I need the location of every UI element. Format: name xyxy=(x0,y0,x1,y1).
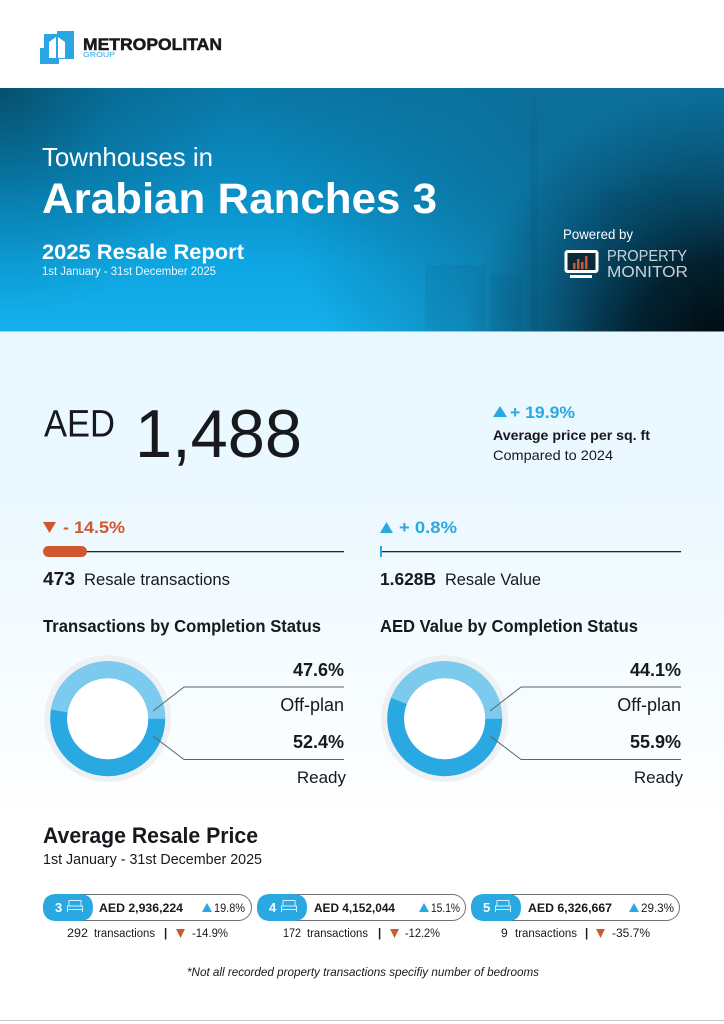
price card: 5 bedrooms: 29.3% xyxy=(641,901,674,915)
price card: 5 bedrooms: AED 6,326,667 xyxy=(528,901,612,915)
price change callout xyxy=(493,403,650,463)
price card: 4 bedrooms: 172 xyxy=(283,928,301,940)
metric: resale value xyxy=(380,518,681,589)
donut chart: transactions: Ready xyxy=(297,768,346,787)
price card: 5 bedrooms: -35.7% xyxy=(612,926,650,940)
price card: 3 bedrooms: 3 xyxy=(55,900,62,915)
skyline silhouettes xyxy=(425,92,690,331)
donut chart: AED value: Off-plan xyxy=(617,695,681,715)
price card: 3 bedrooms: -14.9% xyxy=(192,926,228,940)
price card: 4 bedrooms: 15.1% xyxy=(431,901,460,915)
price card: 3 bedrooms: 19.8% xyxy=(214,901,245,915)
donut chart: AED value: 44.1% xyxy=(630,660,681,680)
date range: average resale price: 1st January - 31st December 2025 xyxy=(43,852,262,868)
headline price per sq ft: 1,488 xyxy=(135,396,302,472)
price card: 5 bedrooms: 5 xyxy=(483,900,490,915)
price card: 3 bedrooms: 292 xyxy=(67,926,88,940)
metric: resale transactions: Resale transactions xyxy=(84,571,230,589)
subheading: 2025 Resale Report: 2025 Resale Report xyxy=(42,241,244,264)
heading: Arabian Ranches 3: Arabian Ranches 3 xyxy=(42,175,437,223)
donut chart: transactions: 47.6% xyxy=(293,660,344,680)
price card: 3 bedrooms: | xyxy=(164,928,167,940)
page background xyxy=(0,332,724,822)
heading: transactions by completion status: Transactions by Completion Status xyxy=(43,616,321,636)
donut chart: AED value xyxy=(381,655,684,787)
price card: 5 bedrooms: 9 xyxy=(501,926,508,940)
Property Monitor logo: PROPERTY xyxy=(607,248,687,265)
price card: 4 bedrooms: -12.2% xyxy=(405,926,440,940)
price change callout: Average price per sq. ft xyxy=(493,427,650,443)
donut chart: AED value: 55.9% xyxy=(630,732,681,752)
headline price per sq ft: AED xyxy=(44,404,115,446)
powered by label: Powered by xyxy=(563,227,633,242)
price card: 3 bedrooms: transactions xyxy=(94,928,155,940)
price card: 4 bedrooms: | xyxy=(378,928,381,940)
price card: 5 bedrooms xyxy=(471,894,680,940)
donut chart: transactions: Off-plan xyxy=(280,695,344,715)
metric: resale transactions xyxy=(43,518,344,589)
metric: resale value: Resale Value xyxy=(445,571,541,589)
Property Monitor logo: MONITOR xyxy=(607,264,688,281)
logo: Metropolitan Group: METROPOLITAN xyxy=(83,35,222,54)
footnote: *Not all recorded property transactions specifiy number of bedrooms xyxy=(187,965,539,979)
price card: 4 bedrooms: 4 xyxy=(269,900,277,915)
donut chart: AED value: Ready xyxy=(634,768,684,787)
logo: Metropolitan Group: GROUP xyxy=(83,52,115,59)
date range: 1st January - 31st December 2025 xyxy=(42,266,216,278)
price card: 3 bedrooms: AED 2,936,224 xyxy=(99,901,183,915)
metric: resale transactions: - 14.5% xyxy=(63,518,125,537)
heading: average resale price: Average Resale Price xyxy=(43,823,258,848)
heading: AED value by completion status: AED Value by Completion Status xyxy=(380,616,638,636)
hero banner xyxy=(0,88,724,332)
donut chart: transactions xyxy=(44,655,346,787)
metric: resale value: 1.628B xyxy=(380,569,436,589)
metric: resale transactions: 473 xyxy=(43,569,75,589)
Property Monitor logo xyxy=(566,248,688,281)
heading: Townhouses in: Townhouses in xyxy=(42,142,213,172)
price card: 4 bedrooms xyxy=(257,894,466,940)
price card: 3 bedrooms xyxy=(43,894,252,940)
price card: 5 bedrooms: transactions xyxy=(515,928,577,940)
headline price per sq ft xyxy=(44,396,302,472)
price card: 4 bedrooms: AED 4,152,044 xyxy=(314,901,395,915)
price card: 5 bedrooms: | xyxy=(585,928,588,940)
price card: 4 bedrooms: transactions xyxy=(307,928,368,940)
metric: resale value: + 0.8% xyxy=(399,518,457,537)
logo: Metropolitan Group xyxy=(40,31,222,64)
donut chart: transactions: 52.4% xyxy=(293,732,344,752)
price change callout: Compared to 2024 xyxy=(493,447,613,463)
price change callout: + 19.9% xyxy=(510,403,575,422)
